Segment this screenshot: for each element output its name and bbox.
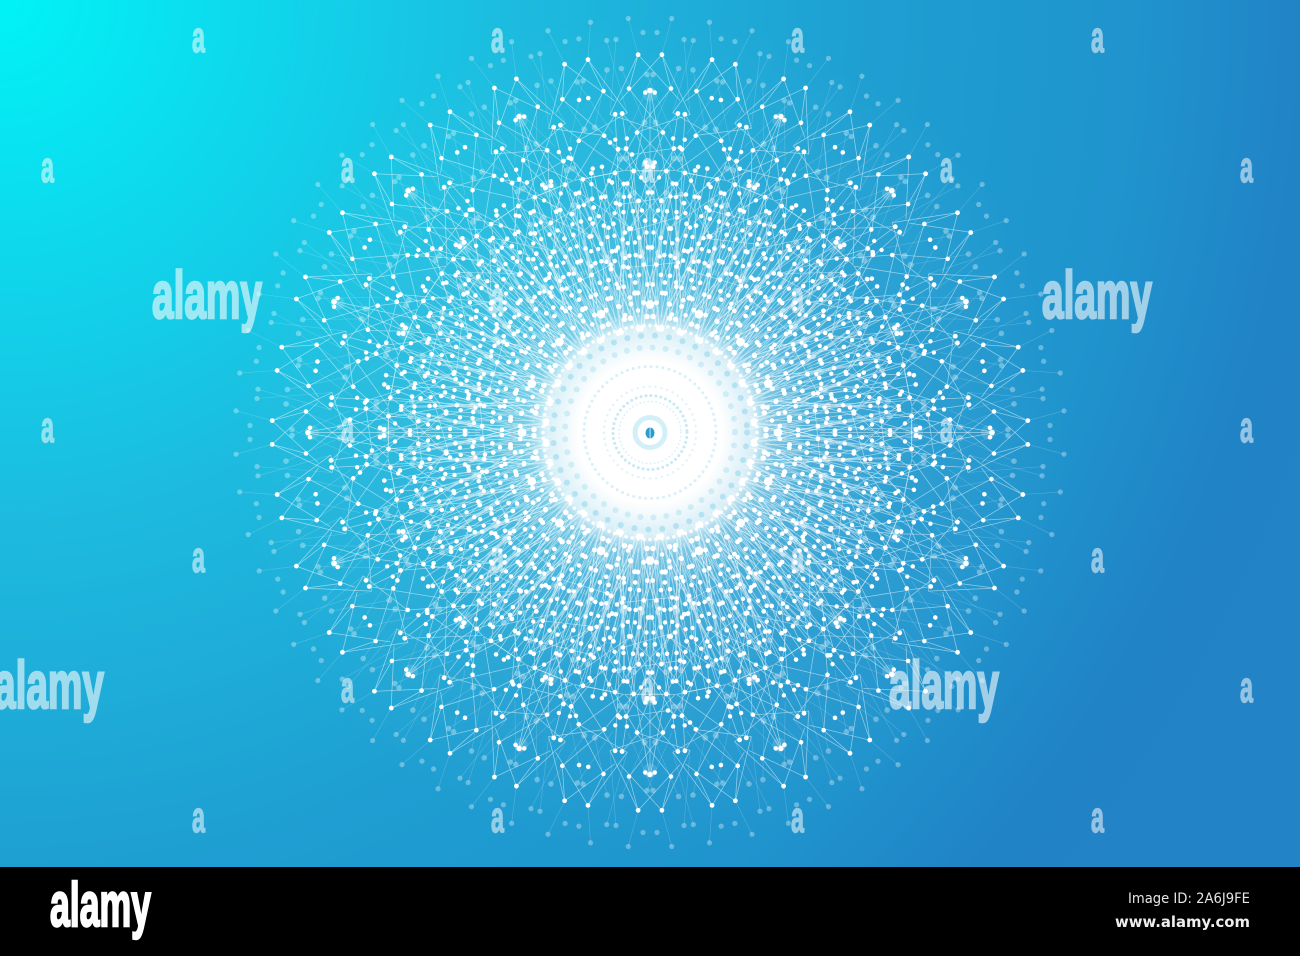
small watermark letters: a xyxy=(791,793,804,842)
small watermark letters: a xyxy=(1091,13,1104,62)
small watermark letters: a xyxy=(491,793,504,842)
small watermark letters: a xyxy=(41,143,54,192)
large alamy watermarks: alamy xyxy=(1042,258,1152,333)
large alamy watermarks xyxy=(0,258,1152,723)
black footer band xyxy=(0,867,1300,956)
small watermark letters: a xyxy=(41,403,54,452)
small watermark letters: a xyxy=(1240,143,1253,192)
small watermark letters: a xyxy=(341,143,354,192)
small watermark letters: a xyxy=(1240,403,1253,452)
radial glow xyxy=(230,12,1070,852)
small watermark letters: a xyxy=(1091,533,1104,582)
footer alamy logo: alamy xyxy=(50,871,151,940)
small watermark letters: a xyxy=(192,533,205,582)
small watermark letters: a xyxy=(491,13,504,62)
small watermark letters: a xyxy=(641,143,654,192)
small watermark letters: a xyxy=(791,533,804,582)
large alamy watermarks: alamy xyxy=(152,258,262,333)
small watermark letters: a xyxy=(341,663,354,712)
small watermark letters: a xyxy=(341,403,354,452)
small watermark letters: a xyxy=(791,13,804,62)
central eye xyxy=(646,427,654,439)
small watermark letters: a xyxy=(641,663,654,712)
small watermark letters: a xyxy=(192,793,205,842)
small watermark letters: a xyxy=(1240,663,1253,712)
small watermark letters: a xyxy=(192,13,205,62)
website url: www.alamy.com xyxy=(1115,913,1250,931)
small watermark letters: a xyxy=(491,533,504,582)
small watermark letters: a xyxy=(940,143,953,192)
small watermark letters: a xyxy=(940,403,953,452)
small watermark letters: a xyxy=(1091,793,1104,842)
small watermark letters: a xyxy=(491,273,504,322)
network nodes and links xyxy=(232,14,1068,851)
image id: Image ID: 2A6J9FE xyxy=(1128,891,1250,907)
white core with dotted rings xyxy=(543,326,757,540)
small watermark letters: a xyxy=(791,273,804,322)
large alamy watermarks: alamy xyxy=(889,648,999,723)
mandala network graphic xyxy=(230,12,1070,852)
